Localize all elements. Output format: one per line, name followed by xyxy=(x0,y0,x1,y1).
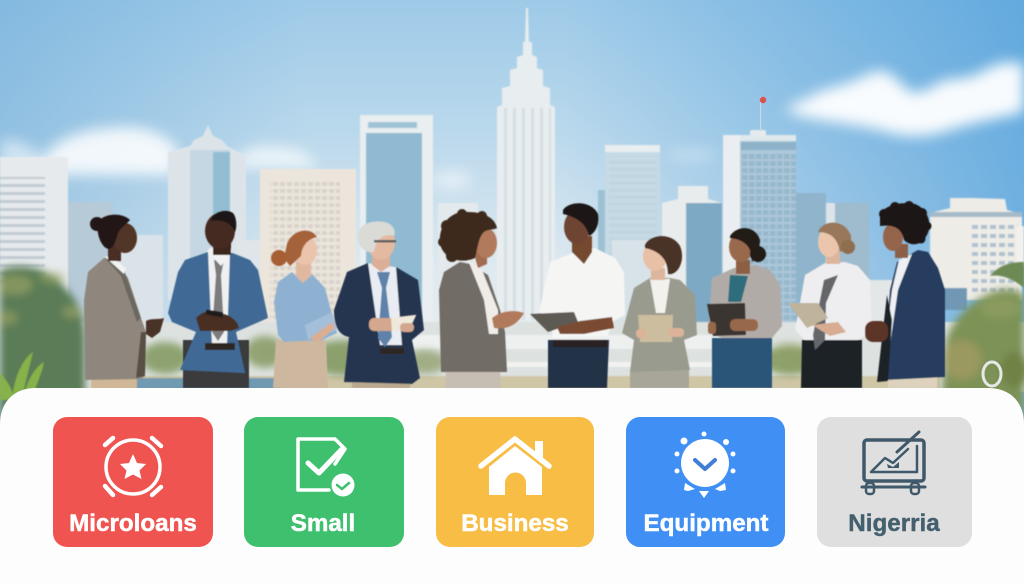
people group xyxy=(84,201,945,390)
person 4: older man in navy suit xyxy=(334,221,424,388)
buildings xyxy=(0,8,1024,346)
card: Equipment xyxy=(626,417,785,547)
photo background: city skyline xyxy=(0,0,1024,426)
low waterfront and terraces xyxy=(0,321,1024,392)
bottom white panel xyxy=(0,388,1024,585)
person 10: curly-haired man in navy blazer xyxy=(865,201,945,388)
palm fronds xyxy=(0,262,1024,400)
icon: chart board on wheels xyxy=(862,432,925,494)
clouds xyxy=(0,62,1024,189)
person 6: man in white shirt with tablet xyxy=(530,203,625,388)
person 7: woman in sage blazer with tablet xyxy=(622,236,697,388)
label: Equipment: Equipment xyxy=(644,510,768,537)
label: Nigerria: Nigerria xyxy=(848,510,940,537)
card: Nigerria xyxy=(817,417,972,547)
label: Microloans: Microloans xyxy=(69,510,197,537)
card: Business xyxy=(436,417,594,547)
icon: sun gear with chevron xyxy=(674,432,736,498)
person 9: woman in white shirt and tie xyxy=(788,223,872,388)
white ring sculpture xyxy=(983,362,1001,386)
person 3: woman in light blue blouse xyxy=(271,231,337,388)
person 5: curly-haired woman in grey blazer xyxy=(438,209,524,388)
trees xyxy=(0,266,1024,426)
person 1: woman in taupe blazer xyxy=(84,215,164,390)
icon: checked document xyxy=(298,439,354,496)
label: Business: Business xyxy=(461,510,569,537)
person 8: woman in grey blouse with dark tablet xyxy=(707,228,782,388)
card: Microloans xyxy=(53,417,213,547)
icon: house xyxy=(481,439,549,495)
person 2: man in blue suit xyxy=(168,211,268,388)
flag xyxy=(760,97,766,131)
icon: alarm clock with star xyxy=(105,438,161,495)
label: Small: Small xyxy=(291,510,355,537)
card: Small xyxy=(244,417,404,547)
